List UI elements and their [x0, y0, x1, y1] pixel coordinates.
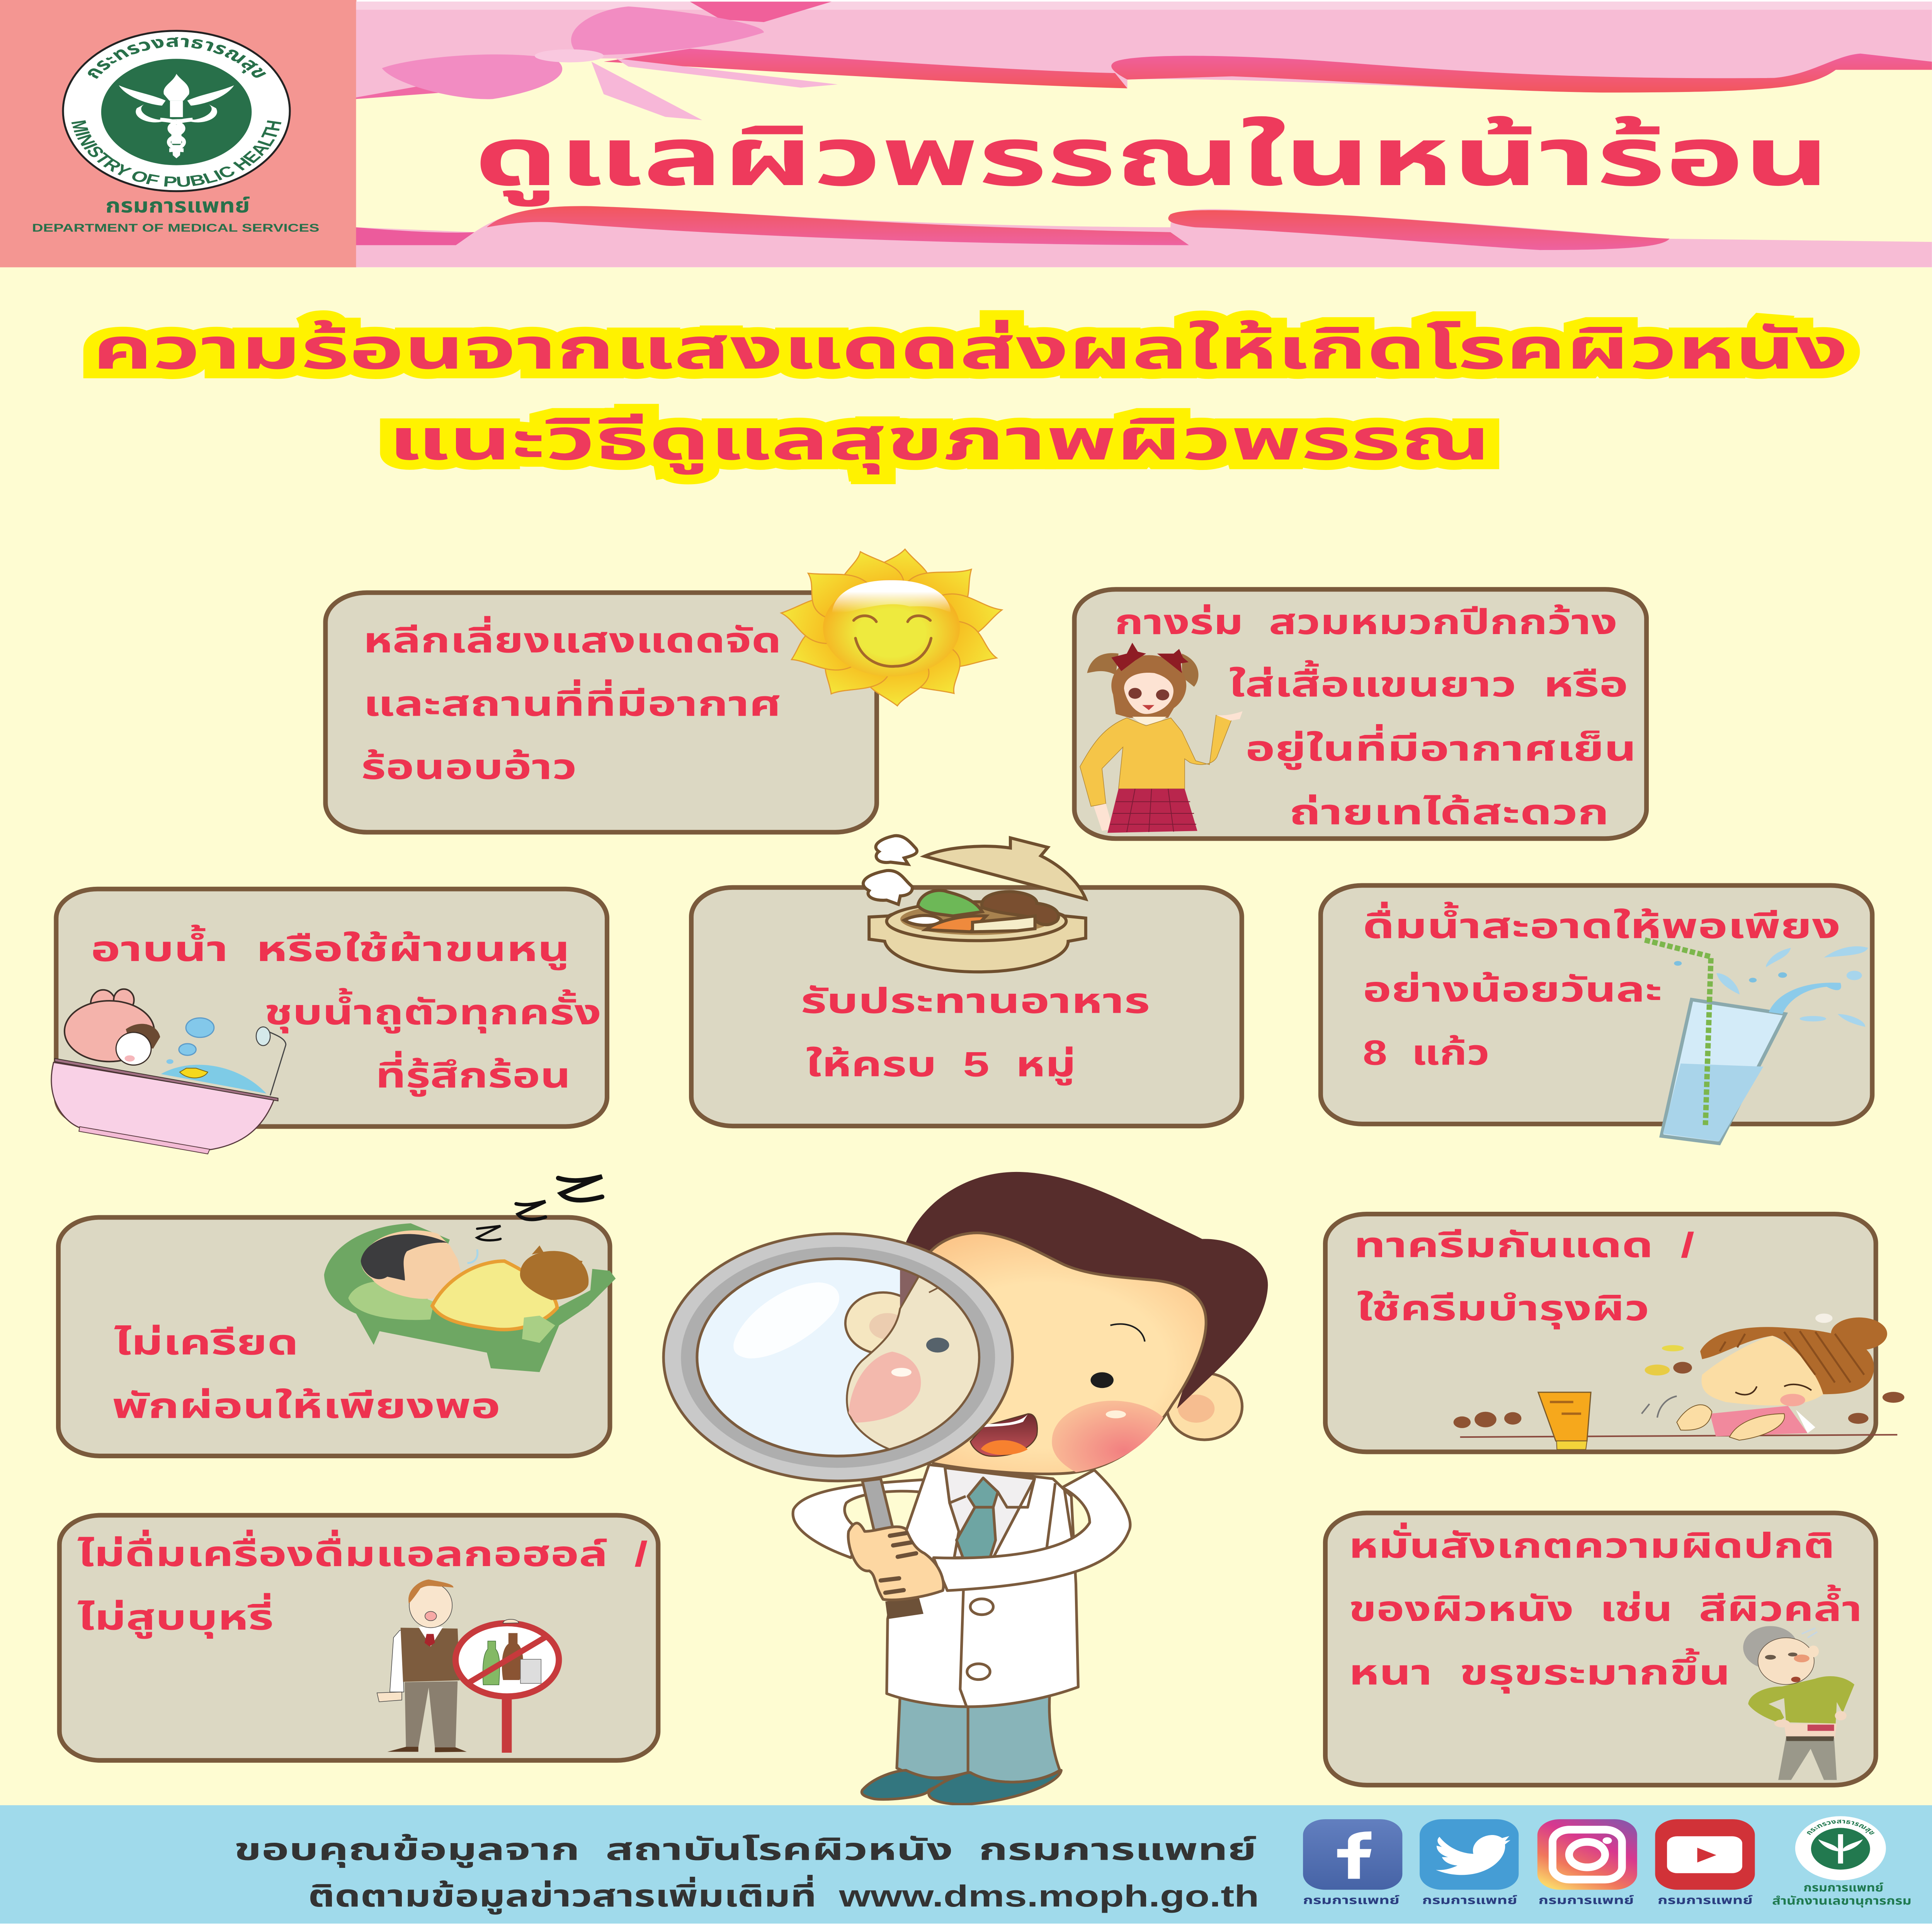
footer	[0, 1805, 1932, 1923]
panel: avoid strong sunlight: และสถานที่ที่มีอากาศ	[363, 679, 781, 723]
department name Thai: กรมการแพทย์	[105, 194, 250, 217]
panel: sunscreen and moisturiser	[1325, 1214, 1904, 1452]
panel: bathing: ชุบน้ำถูตัวทุกครั้ง	[264, 988, 601, 1034]
panel: drink water	[1321, 885, 1872, 1143]
icon: facebook	[1303, 1819, 1402, 1890]
small seal labels: กรมการแพทย์	[1803, 1881, 1883, 1894]
panel: bathing: ที่รู้สึกร้อน	[376, 1051, 571, 1097]
doctor head	[842, 1172, 1268, 1474]
doctor coat	[887, 1465, 1078, 1707]
doctor hands	[848, 1523, 944, 1600]
subtitle line 2: แนะวิธีดูแลสุขภาพผิวพรรณ	[388, 408, 1491, 474]
panel: balanced diet: ให้ครบ 5 หมู่	[806, 1044, 1076, 1086]
social labels: กรมการแพทย์	[1303, 1894, 1400, 1906]
subtitle	[92, 317, 1848, 474]
small seal labels	[1772, 1881, 1912, 1907]
icon: youtube	[1655, 1819, 1755, 1890]
ministry seal	[63, 31, 290, 191]
caduceus emblem	[119, 74, 234, 158]
panel: sunscreen and moisturiser: ทาครีมกันแดด /	[1354, 1225, 1694, 1265]
panel: watch for skin changes: ของผิวหนัง เช่น สีผิวคล้ำ	[1349, 1584, 1862, 1628]
panel: rest and no stress	[58, 1177, 616, 1456]
ribbon banner	[356, 2, 1932, 267]
page background	[0, 267, 1932, 1805]
panel: umbrella and clothing: ใส่เสื้อแขนยาว หรือ	[1229, 660, 1628, 704]
doctor arm back	[793, 1480, 924, 1558]
icon: sun	[775, 546, 1009, 707]
icon: bathtub	[51, 989, 286, 1154]
illustration: doctor with magnifying glass	[663, 1172, 1268, 1804]
doctor arm front	[934, 1470, 1130, 1590]
ministry seal: กระทรวงสาธารณสุข	[79, 32, 274, 82]
panel: avoid strong sunlight: ร้อนอบอ้าว	[361, 747, 577, 787]
social labels: กรมการแพทย์	[1422, 1894, 1517, 1906]
pink bow	[356, 2, 838, 120]
small seal labels: สำนักงานเลขานุการกรม	[1772, 1895, 1912, 1907]
icon: man with no-drinks sign	[377, 1580, 559, 1753]
ministry seal: MINISTRY OF PUBLIC HEALTH	[67, 119, 286, 190]
panel: drink water: 8 แก้ว	[1363, 1033, 1490, 1072]
icon: hot pot	[863, 836, 1086, 972]
social labels: กรมการแพทย์	[1539, 1894, 1634, 1906]
icon: elderly man with rash	[1743, 1626, 1854, 1780]
panel: watch for skin changes: หนา ขรุขระมากขึ้น	[1349, 1648, 1730, 1694]
panel: avoid strong sunlight: หลีกเลี่ยงแสงแดดจัด	[363, 616, 781, 660]
icon: twitter	[1420, 1819, 1519, 1890]
panel: umbrella and clothing: ถ่ายเทได้สะดวก	[1289, 793, 1609, 832]
panel: bathing	[51, 889, 607, 1154]
footer credit text: ขอบคุณข้อมูลจาก สถาบันโรคผิวหนัง กรมการแพทย์	[234, 1832, 1257, 1868]
social labels	[1303, 1894, 1753, 1906]
magnifying glass handle	[862, 1479, 923, 1619]
panel: balanced diet	[691, 836, 1242, 1126]
doctor trousers and shoes	[862, 1694, 1061, 1804]
panel: watch for skin changes	[1325, 1513, 1876, 1785]
icon: sleeping man in bed	[324, 1177, 616, 1372]
magnifying glass	[663, 1234, 1012, 1481]
social labels: กรมการแพทย์	[1658, 1894, 1753, 1906]
panel: umbrella and clothing: กางร่ม สวมหมวกปีกกว้าง	[1115, 602, 1617, 642]
panel: no alcohol or smoking: ไม่ดื่มเครื่องดื่มแอลกอฮอล์ /	[77, 1530, 648, 1574]
icon: woman and sunscreen tube	[1454, 1313, 1904, 1449]
panel: drink water: ดื่มน้ำสะอาดให้พอเพียง	[1363, 901, 1840, 946]
subtitle line 1: ความร้อนจากแสงแดดส่งผลให้เกิดโรคผิวหนัง	[92, 317, 1848, 381]
panel: rest and no stress: พักผ่อนให้เพียงพอ	[112, 1386, 500, 1425]
panel: drink water: อย่างน้อยวันละ	[1363, 969, 1662, 1009]
header banner	[0, 0, 1932, 267]
panel: sunscreen and moisturiser: ใช้ครีมบำรุงผิว	[1357, 1288, 1650, 1329]
panel: no alcohol or smoking	[60, 1515, 658, 1760]
panel: balanced diet: รับประทานอาหาร	[801, 981, 1150, 1020]
panel: no alcohol or smoking: ไม่สูบบุหรี่	[77, 1593, 274, 1639]
main title: ดูแลผิวพรรณในหน้าร้อน	[474, 111, 1830, 207]
panel: watch for skin changes: หมั่นสังเกตความผิดปกติ	[1349, 1522, 1835, 1565]
panel: avoid strong sunlight	[325, 546, 1009, 832]
icon: girl	[1080, 643, 1243, 833]
footer website text: ติดตามข้อมูลข่าวสารเพิ่มเติมที่ www.dms.moph.go.th	[308, 1874, 1259, 1915]
panel: bathing: อาบน้ำ หรือใช้ผ้าขนหนู	[91, 924, 570, 971]
panel: umbrella and clothing	[1074, 589, 1646, 838]
small ministry seal: กระทรวงสาธารณสุข	[1804, 1818, 1877, 1836]
small ministry seal	[1795, 1816, 1886, 1880]
icon: instagram	[1537, 1819, 1637, 1890]
panel: umbrella and clothing: อยู่ในที่มีอากาศเย็น	[1245, 724, 1636, 770]
logo panel	[0, 0, 356, 267]
department name English: DEPARTMENT OF MEDICAL SERVICES	[32, 221, 320, 234]
panel: rest and no stress: ไม่เครียด	[114, 1323, 298, 1362]
icon: glass of water	[1645, 940, 1868, 1143]
